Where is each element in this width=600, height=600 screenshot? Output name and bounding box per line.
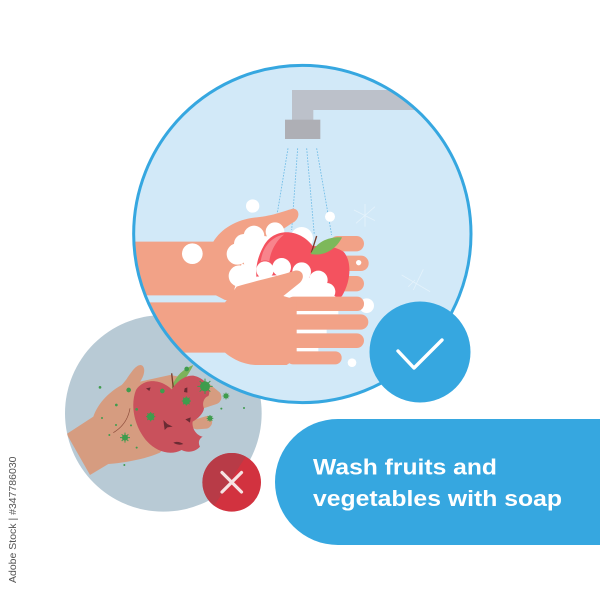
back hand <box>130 209 298 300</box>
blue circle outline <box>134 65 471 403</box>
front hand <box>150 270 303 365</box>
water streams <box>274 148 332 235</box>
callout text: Wash fruits and <box>313 454 497 480</box>
germs <box>99 367 245 466</box>
rotten apple <box>133 365 209 453</box>
icon: red cross badge <box>202 453 261 512</box>
front hand fingers <box>287 297 368 364</box>
faucet <box>285 90 417 139</box>
callout text: vegetables with soap <box>313 486 562 511</box>
finger gap highlights <box>295 311 338 351</box>
grey circle background <box>65 315 262 512</box>
panel: unwashed apple circle <box>65 315 262 512</box>
icon: blue check badge <box>370 302 470 402</box>
light blue circle background <box>134 65 471 403</box>
stock credit: Adobe Stock | #347786030 <box>7 456 19 583</box>
sparkles <box>354 204 430 292</box>
panel: washing hands circle <box>130 65 471 403</box>
soap foam behind apple <box>227 222 313 291</box>
clean apple <box>256 232 349 300</box>
soap foam over apple <box>256 258 336 298</box>
bubbles <box>182 199 374 367</box>
back hand fingers <box>330 236 369 291</box>
callout pill <box>275 419 600 545</box>
dirty hand <box>67 365 221 475</box>
